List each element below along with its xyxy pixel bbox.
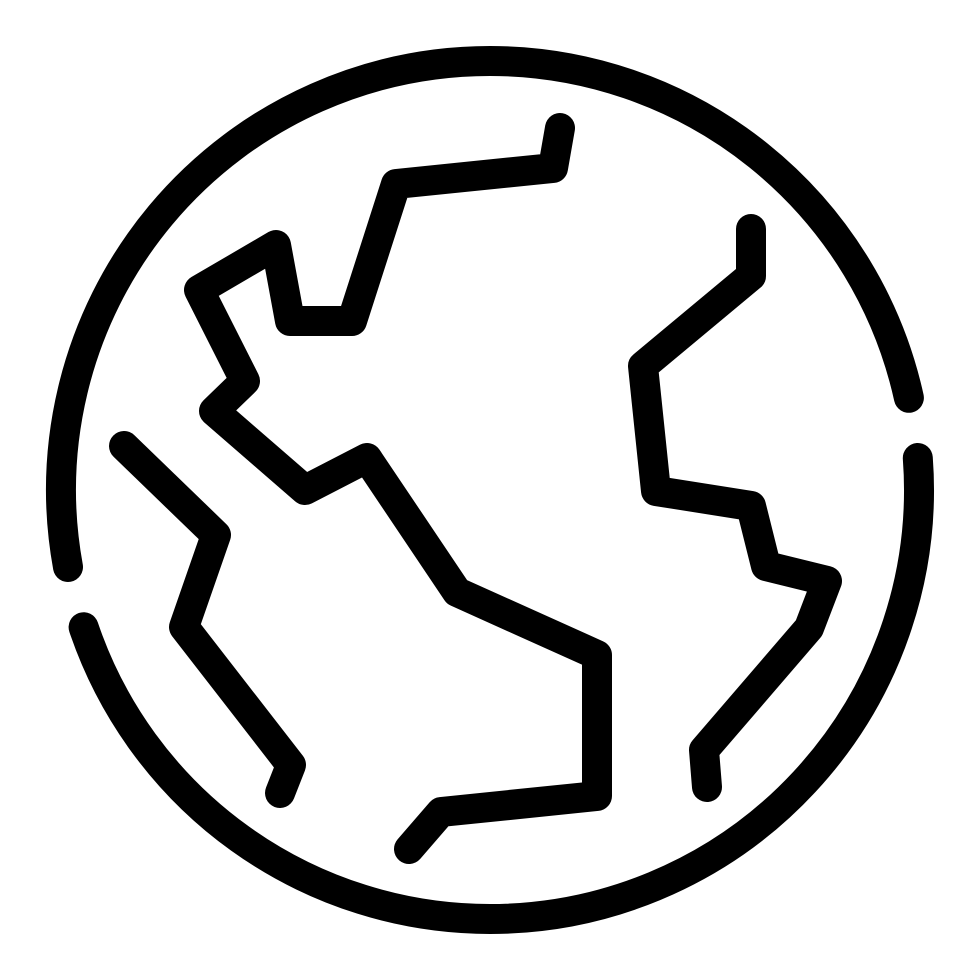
central continent xyxy=(199,128,597,849)
globe outline: upper arc xyxy=(61,61,909,567)
left coastline xyxy=(124,446,291,793)
right coastline xyxy=(643,229,827,787)
globe outline: lower arc xyxy=(84,458,919,919)
